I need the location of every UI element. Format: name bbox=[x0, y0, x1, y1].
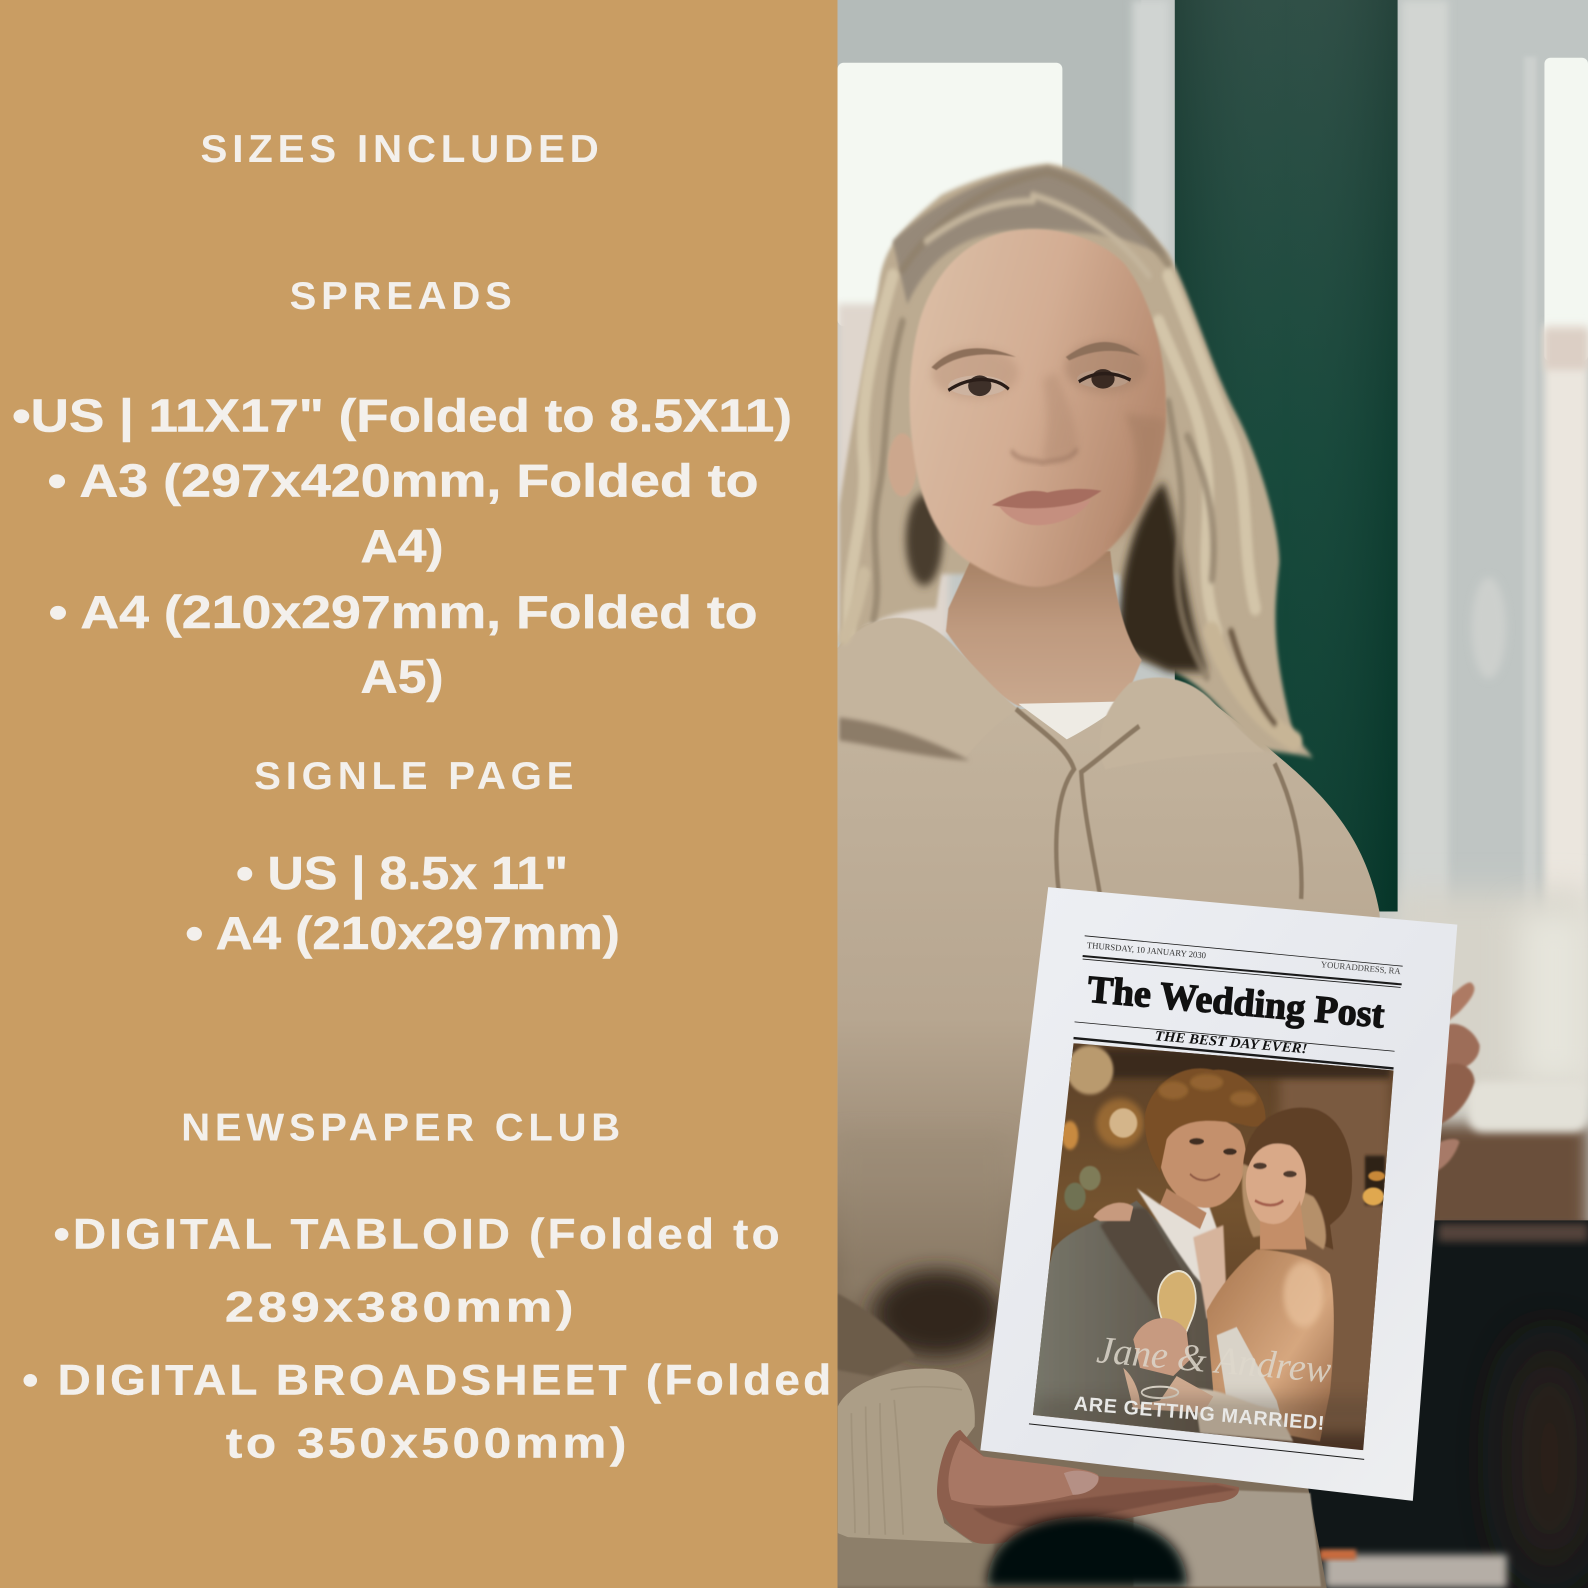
shadow behind newspaper bbox=[873, 1270, 1001, 1357]
text block: spreads sizes bbox=[12, 389, 792, 703]
neck bbox=[946, 551, 1142, 706]
photo: woman holding newspaper bbox=[837, 0, 1588, 1588]
sleeve cuff bbox=[838, 1369, 975, 1543]
heading: spreads: SPREADS bbox=[290, 275, 517, 318]
drawstrings bbox=[1016, 709, 1302, 899]
green column bbox=[1175, 0, 1398, 911]
face bbox=[910, 229, 1166, 587]
hair strands bbox=[849, 172, 1255, 677]
palm and thumb bbox=[937, 1430, 1239, 1544]
text block: spreads sizes: •US | 11X17" (Folded to 8.5X11) bbox=[12, 389, 792, 441]
masthead: The Wedding Post bbox=[1086, 969, 1386, 1037]
text block: newspaper club sizes: 289x380mm) bbox=[225, 1284, 577, 1332]
panel: sizes text background bbox=[0, 0, 838, 1588]
t-shirt collar bbox=[1018, 701, 1125, 739]
heading: sizes included: SIZES INCLUDED bbox=[201, 128, 604, 171]
text block: spreads sizes: • A3 (297x420mm, Folded to bbox=[48, 454, 759, 506]
date line: THURSDAY, 10 JANUARY 2030 bbox=[1087, 940, 1207, 960]
heading: single page: SIGNLE PAGE bbox=[254, 755, 578, 798]
text block: single page sizes bbox=[185, 847, 620, 959]
heading: newspaper club: NEWSPAPER CLUB bbox=[181, 1106, 625, 1149]
couple photo bbox=[1033, 1043, 1394, 1450]
woman bbox=[1193, 1108, 1352, 1441]
hoodie lower shading, sleeve and hand bbox=[837, 1133, 1321, 1586]
bokeh background bbox=[1062, 1045, 1390, 1433]
newspaper header rules bbox=[1029, 936, 1403, 1459]
tagline: THE BEST DAY EVER! bbox=[1154, 1028, 1308, 1057]
newspaper page bbox=[980, 887, 1457, 1501]
right hand fingers bbox=[1438, 981, 1481, 1171]
text block: spreads sizes: A4) bbox=[361, 520, 444, 572]
text block: newspaper club sizes: to 350x500mm) bbox=[226, 1419, 630, 1467]
window and wall background bbox=[838, 0, 1588, 1405]
hoodie body bbox=[838, 622, 1398, 1588]
dark foreground blob bbox=[987, 1516, 1187, 1586]
newspaper bbox=[980, 887, 1457, 1501]
text block: newspaper club sizes: •DIGITAL TABLOID (Folded to bbox=[54, 1211, 783, 1259]
window sill and dark cabinet bbox=[1296, 1082, 1588, 1588]
couple names: Jane & Andrew bbox=[1095, 1329, 1333, 1392]
hand and champagne glass bbox=[1123, 1271, 1213, 1413]
hair falling over hood bbox=[844, 574, 1294, 740]
text block: newspaper club sizes: • DIGITAL BROADSHEET (Folded bbox=[22, 1357, 835, 1405]
text block: single page sizes: • US | 8.5x 11" bbox=[236, 847, 568, 899]
facial features bbox=[931, 342, 1166, 545]
man bbox=[1033, 1068, 1266, 1441]
text block: spreads sizes: A5) bbox=[361, 651, 444, 703]
announcement: ARE GETTING MARRIED! bbox=[1073, 1393, 1325, 1435]
text block: newspaper club sizes bbox=[22, 1211, 835, 1467]
address line: YOURADDRESS, RA bbox=[1320, 959, 1402, 976]
hair back bbox=[840, 164, 1313, 899]
text block: spreads sizes: • A4 (210x297mm, Folded to bbox=[49, 586, 758, 638]
text block: single page sizes: • A4 (210x297mm) bbox=[185, 907, 620, 959]
ear bbox=[888, 433, 917, 497]
hood bbox=[871, 617, 1017, 708]
